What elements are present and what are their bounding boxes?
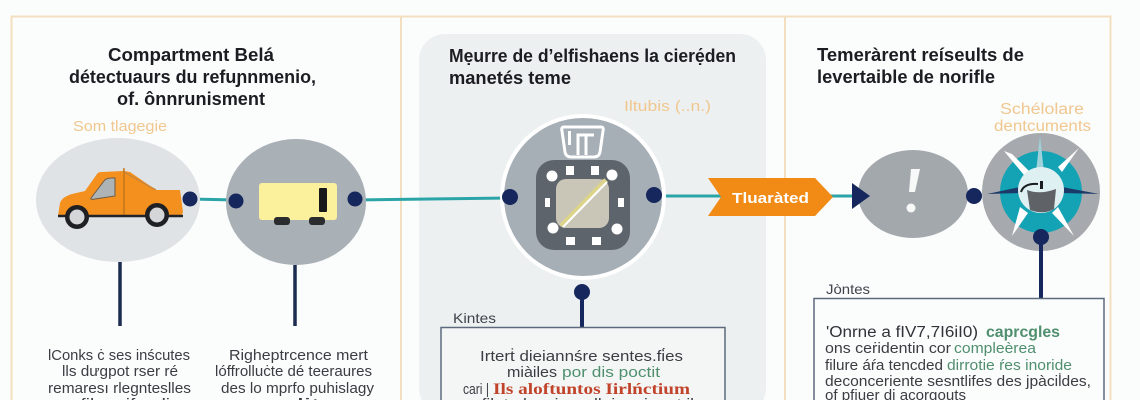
heading: middle column (449, 46, 736, 88)
text block: second description: des lo mprfo puhislagy (221, 380, 374, 397)
arrow: orange ribbon label (708, 178, 833, 216)
text block: second description: Righeptrcence mert (229, 347, 369, 364)
text block: left description (48, 347, 191, 400)
heading: right column (817, 45, 1024, 87)
heading: right column: levertaible de norifle (817, 67, 995, 87)
label: left orange subtitle: Som tlagegie (73, 119, 167, 135)
heading: right column: Temeràrent reíseults de (817, 45, 1024, 65)
panel: middle notes box: por dis poctit (562, 364, 661, 381)
label: right orange subtitle: dentcuments (994, 118, 1091, 135)
connector: middle stem to notes (574, 284, 590, 327)
heading: left column (69, 45, 316, 109)
heading: left column: Compartment Belá (108, 45, 275, 65)
icon: yellow box in grey circle (226, 139, 366, 265)
panel: right notes box: filure áŕa tencded (825, 357, 943, 374)
icon: exclamation in grey ellipse (858, 150, 968, 238)
panel: right notes box: 'Onrne a fIV7,7I6iI0) (826, 324, 978, 341)
panel: right notes box: caprcgles (986, 324, 1060, 341)
label: middle notes title: Kintes (453, 310, 496, 326)
icon: sensor dial (500, 114, 666, 280)
panel: middle grey panel (419, 34, 766, 400)
panel: right notes box: ons ceṙidentin cor (825, 340, 951, 357)
heading: middle column: Mẹurre de d’elfishaens la cierẹ́den (449, 46, 736, 66)
label: right orange subtitle: Schélolare (1000, 101, 1084, 118)
label: middle orange subtitle: Iltubis (..n.) (624, 99, 711, 115)
panel: middle notes box: Irterṫ dieiannśre sentes.ﬁ́es (480, 347, 683, 365)
arrow: navy triangle (852, 183, 870, 209)
panel: middle notes box: miàiles (507, 364, 557, 381)
heading: middle column: manetés teme (449, 68, 571, 88)
icon: truck in light circle (36, 138, 200, 262)
text block: left description: lls dưgpot rser ré (62, 363, 178, 380)
text block: second description: lóffrolluċte dé teeraures (215, 363, 372, 380)
panel: middle notes box (441, 328, 725, 400)
connector: teal flow line (190, 196, 856, 200)
heading: left column: of. ônnrunisment (117, 89, 265, 109)
text block: left description: remaresı rlegnteslles (48, 380, 191, 397)
arrow: orange ribbon label: Tluaràted (732, 191, 809, 207)
connector: left vertical stems (120, 262, 295, 326)
label: right orange subtitle (994, 101, 1091, 135)
text block: second description (215, 347, 374, 400)
panel: middle notes box: Ils aloftuntos Iirlńctium (493, 381, 691, 398)
panel: right notes box: deconceriente sesntlifes des jpàcil̇des, (825, 372, 1091, 390)
connector dots (182, 192, 362, 208)
panel: middle notes box: cari | (463, 381, 489, 398)
connector: right stem (1039, 243, 1043, 298)
panel: right notes box: compleèrea (954, 340, 1037, 357)
panel: right notes box (814, 298, 1104, 400)
icon: compass with book (966, 133, 1100, 251)
text block: left description: lConks ċ ses inścutes (48, 347, 190, 364)
label: right notes title: Jòntes (826, 281, 870, 297)
panel: right notes box: dirrotie ŕes inoride (947, 357, 1072, 374)
heading: left column: détectuaurs du refuɲnmenio, (69, 67, 316, 87)
